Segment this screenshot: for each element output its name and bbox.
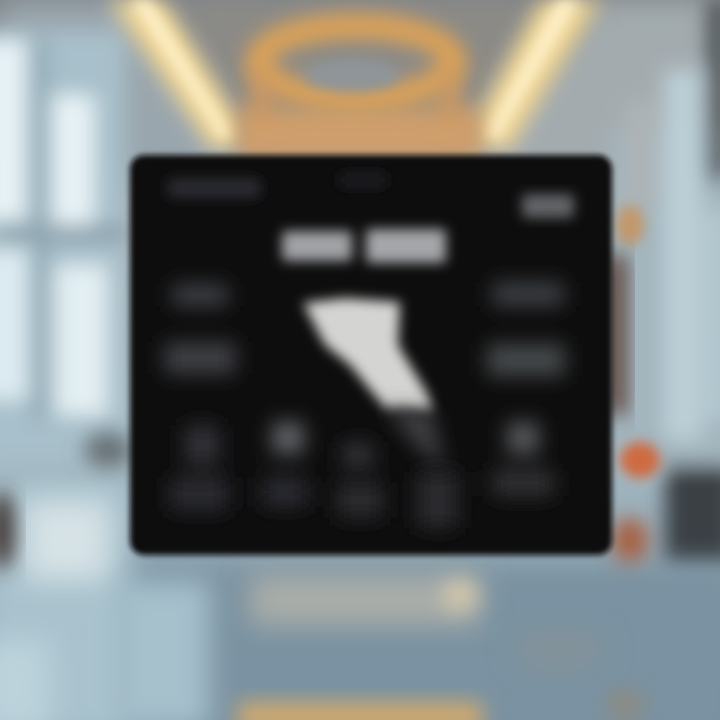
right text block smudges: [487, 282, 565, 376]
orange accents right of panel: [608, 205, 660, 562]
left windows: [0, 30, 125, 460]
panel: black display: [130, 155, 612, 555]
header smudge left: [168, 178, 260, 198]
bottom column smudges: [170, 422, 554, 528]
dark smudge left of panel: [84, 432, 132, 468]
central map shape: [303, 298, 445, 470]
left text block smudges: [164, 284, 236, 374]
right wall columns: [610, 0, 720, 565]
header smudge centre: [340, 172, 386, 188]
dark object at left edge: [0, 490, 14, 570]
header smudge right: [522, 194, 574, 218]
heading smudge: [282, 229, 446, 263]
orange ceiling ring: [238, 26, 482, 160]
ceiling light strips: [108, 0, 602, 150]
floor: [0, 480, 720, 720]
